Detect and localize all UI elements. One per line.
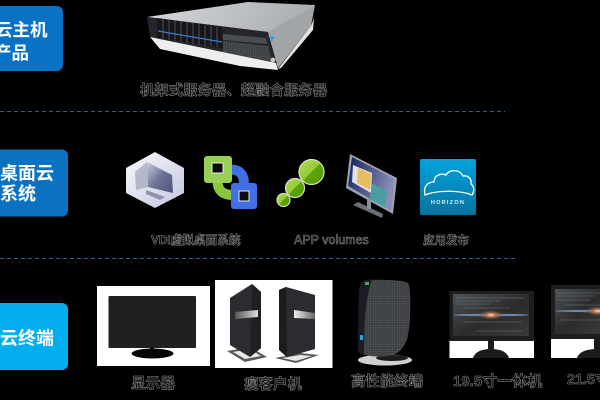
icon: desktop monitor xyxy=(346,154,397,218)
label: VDI虚拟桌面系统: VDI虚拟桌面系统 xyxy=(151,233,241,247)
label: 高性能终端: 高性能终端 xyxy=(351,372,423,390)
image: high performance terminal xyxy=(358,280,412,366)
panel: 桌面云系统 heading: 系统 xyxy=(0,183,36,204)
image: 21.5 inch all-in-one xyxy=(551,285,600,358)
label: 19.5寸一体机: 19.5寸一体机 xyxy=(453,373,542,390)
label: 应用发布: 应用发布 xyxy=(423,233,469,247)
label: 显示器: 显示器 xyxy=(131,375,175,392)
panel: 云终端 heading xyxy=(0,303,68,370)
label: 瘦客户机: 瘦客户机 xyxy=(244,375,302,393)
image: monitor on white panel xyxy=(97,286,210,366)
panel: 云主机产品 heading xyxy=(0,6,63,71)
image: thin client towers on white panel xyxy=(215,280,332,368)
panel: 桌面云系统 heading xyxy=(0,150,68,216)
icon: VMware linked squares xyxy=(204,156,257,209)
icon: Horizon cloud tile: HORIZON xyxy=(431,200,465,206)
icon: VDI cube xyxy=(126,152,184,208)
icon: Horizon cloud tile xyxy=(420,159,476,215)
panel: 桌面云系统 heading: 桌面云 xyxy=(0,164,54,184)
label: 机架式服务器、超融合服务器: 机架式服务器、超融合服务器 xyxy=(140,81,328,99)
image: 19.5 inch all-in-one xyxy=(450,291,534,358)
panel: 云终端 heading: 云终端 xyxy=(0,328,54,348)
icon: App Volumes green spheres xyxy=(277,160,324,206)
image: rack server xyxy=(147,2,315,70)
label: APP volumes: APP volumes xyxy=(294,233,369,247)
